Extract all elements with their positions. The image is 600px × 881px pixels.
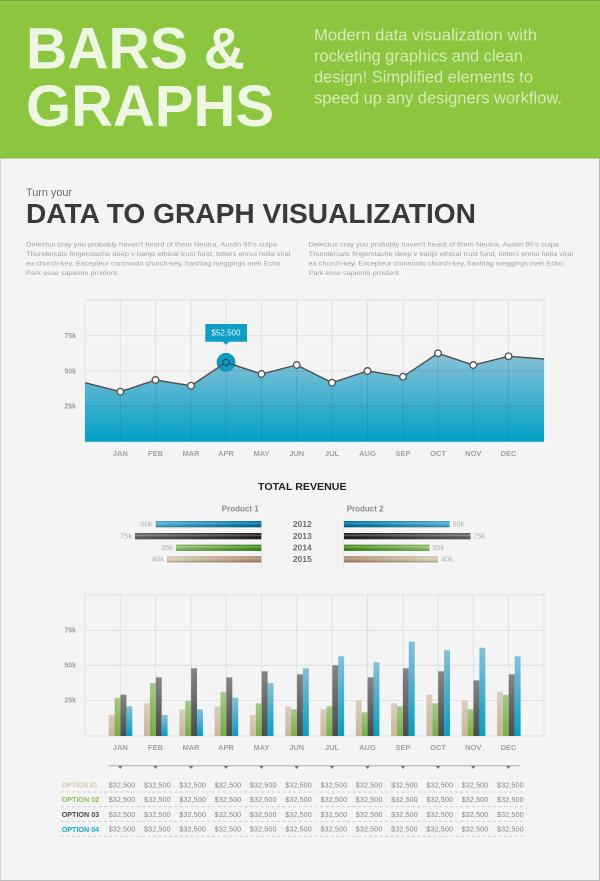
month labels: JUL <box>325 449 340 458</box>
row: option 02: $32,500 <box>426 795 453 804</box>
paragraph right: Thundercats fingerstache deep v banjo ethical trust fund, bitters ennui hella viral <box>308 251 574 258</box>
row: option 01: $32,500 <box>356 780 382 789</box>
month labels: JAN <box>113 449 128 458</box>
month labels: FEB <box>148 449 164 458</box>
row: option 04: $32,500 <box>109 825 135 834</box>
row: option 04: $32,500 <box>144 825 171 834</box>
row: option 03: $32,500 <box>462 810 488 819</box>
year labels: 2014 <box>293 542 312 552</box>
row: option 01: $32,500 <box>179 780 206 789</box>
month labels: NOV <box>465 743 481 752</box>
main title: GRAPHS <box>26 74 274 139</box>
row: option 04: $32,500 <box>285 825 312 834</box>
row: option 02: $32,500 <box>497 795 524 804</box>
row: option 02: $32,500 <box>391 795 418 804</box>
year labels: 2013 <box>293 531 312 541</box>
row: option 02: $32,500 <box>320 795 347 804</box>
bar highlights <box>135 522 470 559</box>
chart title: TOTAL REVENUE <box>258 481 347 493</box>
row: option 03: $32,500 <box>109 810 135 819</box>
intro text: Modern data visualization with <box>314 26 537 44</box>
month labels: OCT <box>430 743 446 752</box>
year labels: 2015 <box>293 554 312 564</box>
intro text <box>314 26 562 108</box>
section heading: DATA TO GRAPH VISUALIZATION <box>26 198 476 229</box>
row: option 03: $32,500 <box>497 810 524 819</box>
grouped bar chart <box>64 595 544 752</box>
highlight circle <box>217 353 235 371</box>
paragraph right <box>308 242 574 277</box>
month labels: JUN <box>289 449 304 458</box>
area fill <box>85 353 544 442</box>
month labels: MAY <box>254 743 269 752</box>
row: option 03: $32,500 <box>250 810 277 819</box>
row: option 01: $32,500 <box>215 780 241 789</box>
area chart <box>64 300 544 458</box>
row: option 01: OPTION 01 <box>62 780 98 790</box>
row: option 04: $32,500 <box>426 825 453 834</box>
month labels: OCT <box>430 449 446 458</box>
row: option 03: $32,500 <box>320 810 347 819</box>
year labels <box>293 519 312 564</box>
month labels: FEB <box>148 743 164 752</box>
row: option 01: $32,500 <box>497 780 524 789</box>
row: option 04: $32,500 <box>356 825 382 834</box>
paragraph left: Thundercats fingerstache deep v banjo ethical trust fund, bitters ennui hella viral <box>26 251 291 258</box>
row: option 01 <box>62 780 524 790</box>
row: option 02: $32,500 <box>215 795 241 804</box>
row: option 02: $32,500 <box>250 795 277 804</box>
y axis labels: 25k <box>64 404 76 410</box>
month labels: APR <box>218 743 234 752</box>
y axis labels <box>64 627 76 705</box>
value labels left <box>120 520 173 564</box>
month labels: APR <box>218 449 234 458</box>
y axis labels: 75k <box>64 333 76 340</box>
y axis labels <box>64 333 76 410</box>
paragraph right: Park esse sapiente proident. <box>308 270 401 277</box>
row: option 02: $32,500 <box>462 795 488 804</box>
data points <box>117 350 512 395</box>
value labels left: 40k <box>152 555 164 564</box>
row: option 04: $32,500 <box>462 825 488 834</box>
bar shadows <box>135 526 470 562</box>
row: option 04: $32,500 <box>391 825 418 834</box>
main title: BARS & <box>26 16 245 82</box>
tooltip: $52,500 <box>212 329 241 338</box>
paragraph left <box>26 242 291 277</box>
row: option 02 <box>62 795 524 804</box>
value labels right <box>432 520 485 564</box>
total revenue chart <box>120 481 485 568</box>
month labels: DEC <box>501 449 517 458</box>
table pointer row <box>109 766 520 769</box>
row: option 02: $32,500 <box>179 795 206 804</box>
row: option 03: $32,500 <box>426 810 453 819</box>
y axis labels: 50k <box>64 662 76 670</box>
row: option 04 <box>62 825 524 834</box>
month labels: JAN <box>113 743 128 752</box>
row: option 04: OPTION 04 <box>62 825 100 834</box>
bars <box>109 642 521 736</box>
paragraph right: Delectus cray you probably haven't heard of them Neutra, Austin 90's culpa <box>308 242 559 248</box>
row: option 01: $32,500 <box>144 780 171 789</box>
month labels: JUN <box>289 743 304 752</box>
row: option 03: $32,500 <box>285 810 312 819</box>
row: option 02: $32,500 <box>109 795 135 804</box>
row: option 01: $32,500 <box>109 780 135 789</box>
row: option 04: $32,500 <box>497 825 524 834</box>
header banner <box>0 0 600 158</box>
paragraph right: ea church-key. Excepteur commodo church-key, hashtag meggings meh Echo <box>308 260 563 268</box>
row: option 04: $32,500 <box>250 825 277 834</box>
value labels left: 50k <box>141 520 153 528</box>
tooltip <box>205 324 247 345</box>
row: option 03 <box>62 810 524 819</box>
y axis labels: 25k <box>64 698 76 705</box>
value labels right: 40k <box>441 555 453 564</box>
month labels: DEC <box>501 743 517 752</box>
row: option 04: $32,500 <box>215 825 241 834</box>
month labels: JUL <box>325 743 340 752</box>
row: option 02: $32,500 <box>356 795 382 804</box>
paragraph left: Delectus cray you probably haven't heard of them Neutra, Austin 90's culpa <box>26 242 277 248</box>
row: option 01: $32,500 <box>320 780 347 789</box>
month labels: SEP <box>395 449 411 458</box>
row: option 02: $32,500 <box>285 795 312 804</box>
y axis labels: 75k <box>64 627 76 634</box>
row: option 02: OPTION 02 <box>62 795 99 804</box>
year labels: 2012 <box>293 519 312 529</box>
product labels: Product 2 <box>347 505 384 514</box>
paragraph left: ea church-key. Excepteur commodo church-key, hashtag meggings meh Echo <box>26 260 281 268</box>
row: option 01: $32,500 <box>462 780 488 789</box>
row: option 04: $32,500 <box>320 825 347 834</box>
value labels left: 75k <box>120 532 132 540</box>
row: option 01: $32,500 <box>285 780 312 789</box>
row: option 01: $32,500 <box>426 780 453 789</box>
month labels <box>113 743 517 752</box>
row: option 02: $32,500 <box>144 795 171 804</box>
row: option 03: OPTION 03 <box>62 810 99 819</box>
paragraph left: Park esse sapiente proident. <box>26 270 119 277</box>
main title <box>26 16 274 139</box>
y axis labels: 50k <box>64 368 76 375</box>
month labels <box>113 449 517 458</box>
row: option 03: $32,500 <box>356 810 382 819</box>
value labels left: 35k <box>161 543 173 552</box>
product 2 bars <box>344 521 470 562</box>
data table <box>61 780 524 836</box>
value labels right: 75k <box>473 532 485 540</box>
month labels: AUG <box>359 449 376 458</box>
product 1 bars <box>135 521 261 562</box>
month labels: MAY <box>254 449 269 458</box>
row: option 04: $32,500 <box>179 825 206 834</box>
intro text: design! Simplified elements to <box>314 68 533 86</box>
intro text: speed up any designers workflow. <box>314 90 562 108</box>
row: option 03: $32,500 <box>179 810 206 819</box>
row: option 03: $32,500 <box>215 810 241 819</box>
row: option 03: $32,500 <box>391 810 418 819</box>
row: option 01: $32,500 <box>250 780 277 789</box>
month labels: SEP <box>395 743 411 752</box>
value labels right: 35k <box>432 543 444 552</box>
data line <box>85 353 544 392</box>
month labels: MAR <box>182 449 200 458</box>
row: option 01: $32,500 <box>391 780 418 789</box>
month labels: NOV <box>465 449 481 458</box>
month labels: AUG <box>359 743 376 752</box>
month labels: MAR <box>182 743 200 752</box>
value labels right: 50k <box>452 520 465 528</box>
section heading: Turn your <box>26 187 72 199</box>
product labels <box>222 505 384 514</box>
row: option 03: $32,500 <box>144 810 171 819</box>
product labels: Product 1 <box>222 505 259 514</box>
intro text: rocketing graphics and clean <box>314 48 523 66</box>
